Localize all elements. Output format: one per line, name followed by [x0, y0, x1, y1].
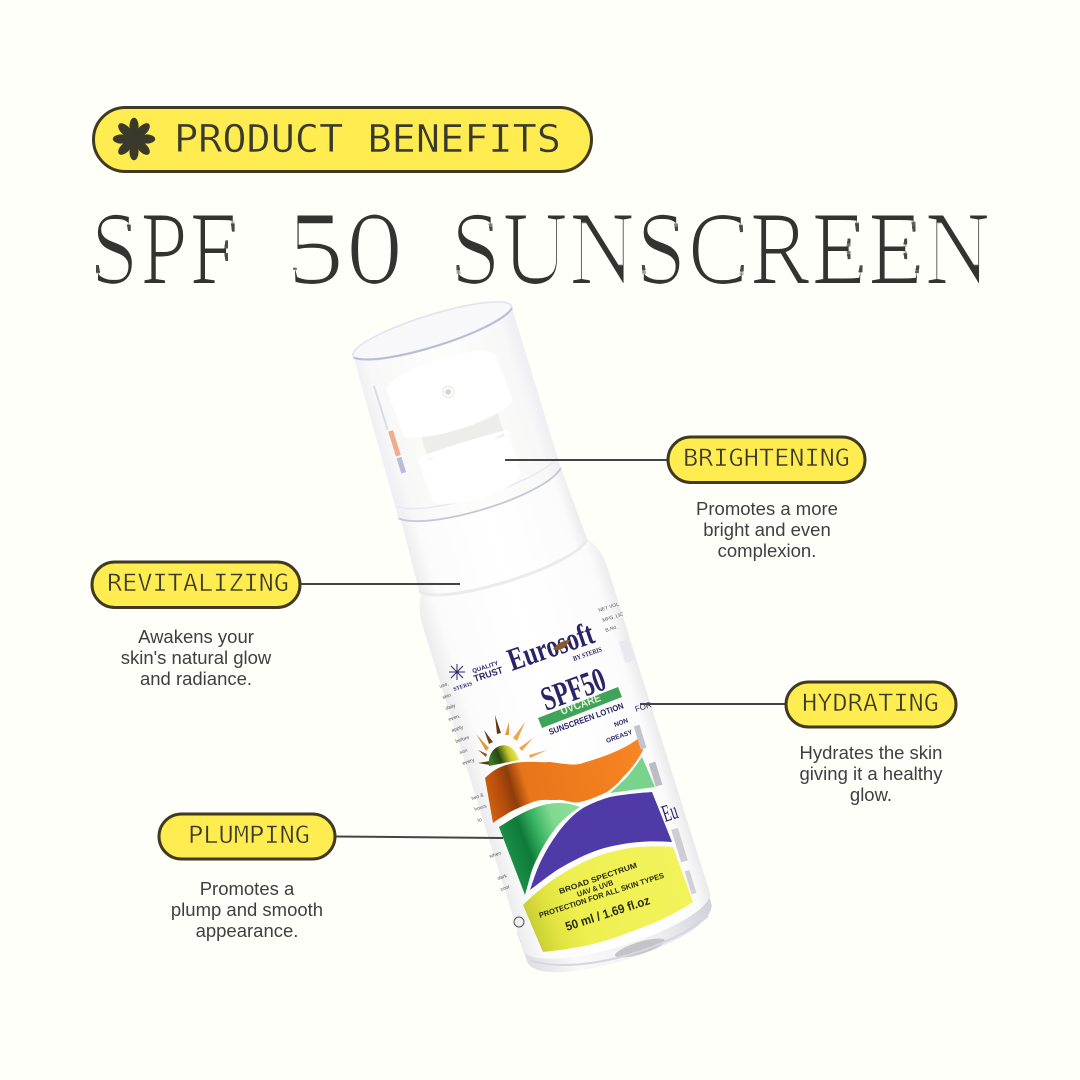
brand wordmark: BY STERIS [572, 646, 603, 663]
callout: brightening [505, 437, 865, 561]
right side small print: MFG. LIC [602, 611, 625, 624]
callout: revitalizing: REVITALIZING [107, 569, 289, 597]
left side small print: hours [474, 803, 488, 813]
right green hill [610, 757, 655, 793]
heading badge: product benefits: PRODUCT BENEFITS [174, 117, 561, 162]
bottle structure [334, 287, 722, 988]
yellow panel text: BROAD SPECTRUM [558, 861, 638, 896]
yellow panel text: UAV & UVB [576, 878, 615, 899]
pump stem [420, 409, 505, 460]
neck [397, 467, 592, 607]
quality trust logo: TRUST [473, 665, 505, 685]
icon: flower [113, 118, 155, 160]
bottle body [412, 535, 717, 974]
yellow panel text: 50 ml / 1.69 fl.oz [564, 893, 652, 934]
quality trust logo: STERIS [453, 681, 473, 693]
non greasy: GREASY [605, 729, 634, 745]
callout: hydrating: HYDRATING [802, 689, 939, 717]
left side small print: skin [442, 692, 452, 701]
callout: plumping: Promotes a [200, 878, 295, 899]
sunscreen lotion: SUNSCREEN LOTION [547, 700, 625, 737]
left side small print: even, [448, 713, 461, 723]
SPF 50 mark: SPF50 [536, 661, 611, 719]
callout: revitalizing: Awakens your [138, 626, 254, 647]
callout: plumping [159, 814, 503, 941]
yellow panel text: PROTECTION FOR ALL SKIN TYPES [538, 871, 665, 920]
left side small print: to [477, 817, 483, 824]
sun [489, 745, 519, 766]
title [90, 192, 991, 306]
left side small print: two & [471, 792, 485, 802]
right side small print: Eu [659, 798, 681, 828]
quality trust logo: QUALITY [472, 661, 499, 675]
label artwork [439, 602, 708, 965]
title: SPF [90, 192, 238, 306]
callout: brightening: Promotes a more [696, 498, 838, 519]
left side small print: daily [445, 703, 457, 712]
left green hill [499, 803, 580, 895]
reflected label through cap [388, 430, 401, 456]
left side small print: before [455, 735, 470, 745]
callout: revitalizing: and radiance. [140, 668, 252, 689]
base highlight [530, 916, 708, 965]
callout: brightening: bright and even [703, 519, 831, 540]
callout: plumping: PLUMPING [188, 821, 310, 849]
quality trust logo [449, 661, 505, 693]
left side small print: dark [497, 873, 508, 882]
callout: hydrating: glow. [850, 784, 892, 805]
left side small print [439, 681, 510, 893]
title: SUNSCREEN [450, 192, 991, 306]
pump nozzle [441, 385, 455, 399]
left side small print: apply [451, 724, 464, 734]
non greasy: NON [613, 717, 630, 729]
orange band [485, 737, 643, 823]
left side small print: when [489, 850, 502, 860]
right side small print: FOR [634, 700, 653, 714]
clear base [517, 874, 721, 988]
pump head [383, 342, 516, 446]
left side small print: sun [459, 748, 468, 756]
pump collar [417, 430, 524, 512]
callout: hydrating: giving it a healthy [800, 763, 943, 784]
brand wordmark: Eurosoft [503, 615, 599, 678]
sun rays [476, 715, 547, 765]
purple hill [530, 792, 672, 890]
callout: plumping: appearance. [196, 920, 298, 941]
callout: revitalizing [92, 562, 460, 689]
left side small print: every [462, 757, 476, 767]
callout: hydrating [640, 682, 956, 805]
callout: revitalizing: skin's natural glow [121, 647, 272, 668]
non greasy [605, 717, 634, 745]
UV care band: UVCARE [559, 692, 602, 718]
recycle mark [514, 917, 524, 927]
right side small print: B.No. [605, 624, 619, 634]
left side small print: cool [500, 884, 510, 893]
callout: plumping: plump and smooth [171, 899, 323, 920]
right side small print [598, 602, 696, 894]
title: 50 [286, 192, 404, 306]
callout: brightening: BRIGHTENING [683, 444, 850, 472]
UV care band [538, 687, 622, 728]
yellow panel text [538, 861, 665, 934]
yellow panel [523, 846, 693, 952]
callout: brightening: complexion. [718, 540, 816, 561]
right side small print: NET VOL [598, 602, 620, 614]
product bottle [334, 287, 722, 988]
clear cap [348, 305, 566, 533]
heading badge: product benefits [94, 108, 592, 172]
left side small print: use, [439, 681, 450, 690]
callout: hydrating: Hydrates the skin [800, 742, 942, 763]
